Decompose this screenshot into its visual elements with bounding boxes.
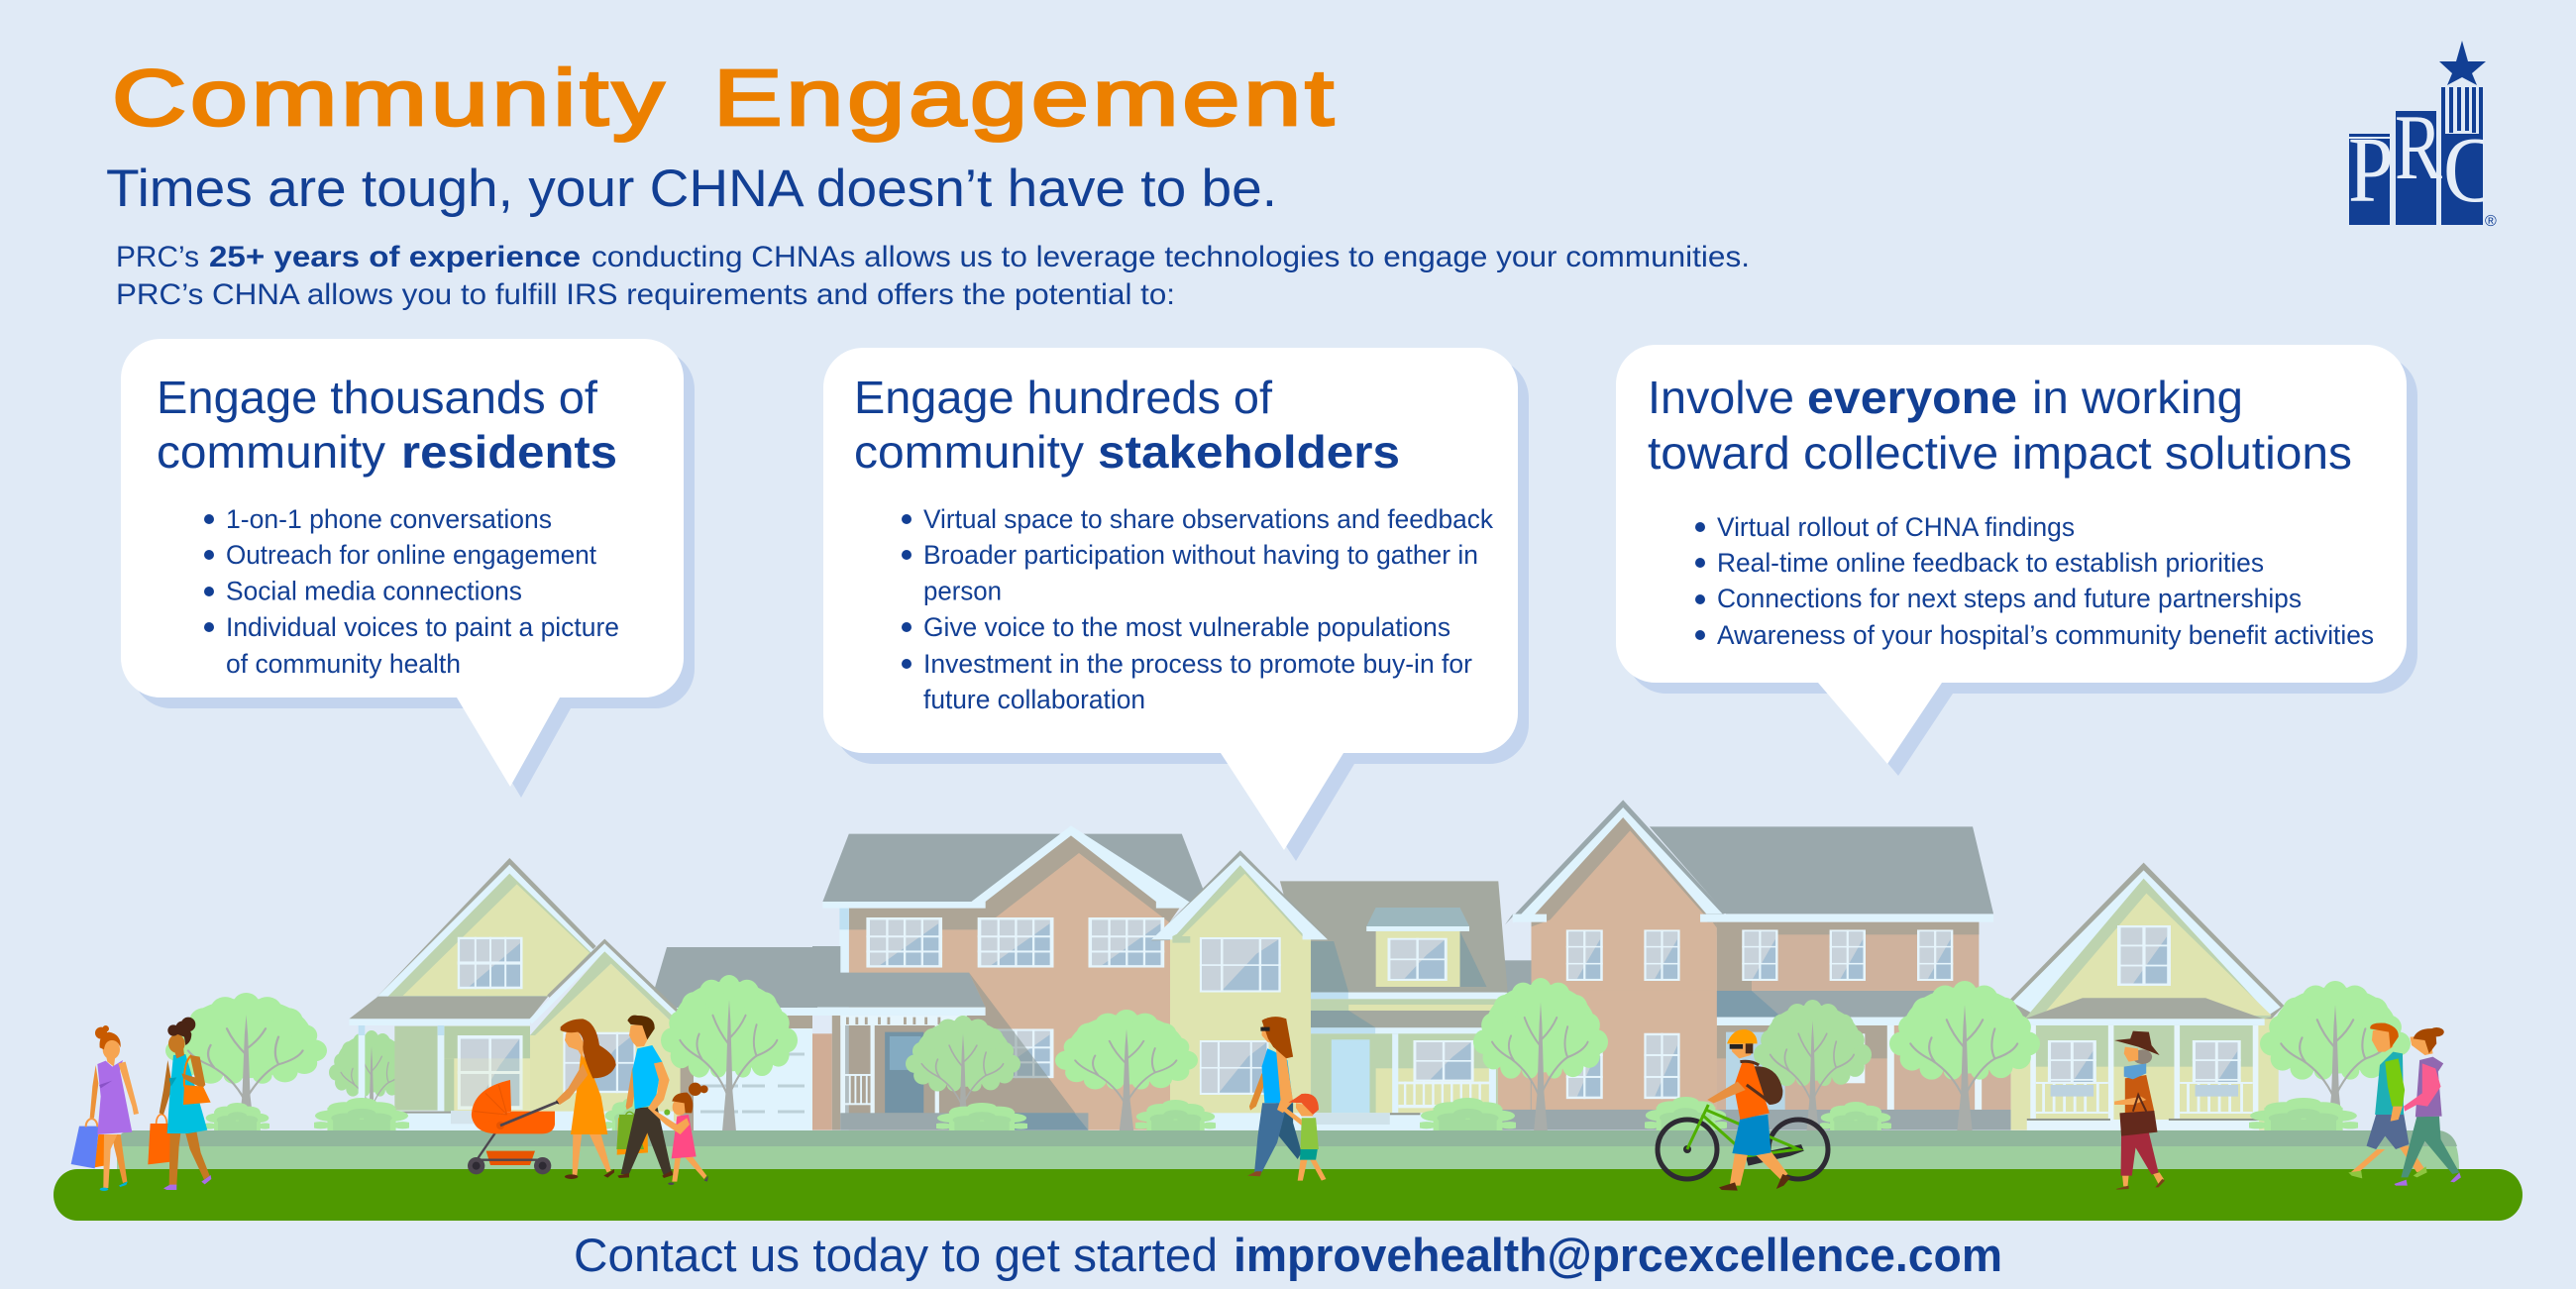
people: family with stroller [468,1016,708,1185]
ground: pavement band [117,1130,2459,1169]
people: walking couple [2348,1023,2461,1186]
logo: PRC: ® [2485,213,2497,230]
bullet list: Connections for next steps and future partnerships [1717,584,2302,613]
logo: PRC: P [2348,119,2394,222]
bullet list [902,504,1493,714]
house: yellow left cottage [349,858,681,1130]
bullet list: person [923,577,1002,606]
heading: toward collective impact solutions [1648,427,2352,479]
people: two women with shopping bags [71,1018,211,1191]
panel: stakeholders speech bubble [823,348,1529,861]
heading: in working [2032,372,2243,423]
heading [1648,372,2352,479]
logo: PRC: C [2443,119,2499,222]
intro paragraph: conducting CHNAs allows us to leverage technologies to engage your communities. [591,241,1750,273]
title: Engagement [713,54,1338,142]
bullet list: Real-time online feedback to establish priorities [1717,548,2264,578]
heading: community [854,426,1084,478]
bullet list: Social media connections [226,577,522,606]
heading: Engage hundreds of [854,372,1272,423]
heading: stakeholders [1098,426,1400,478]
contact line: Contact us today to get started [574,1229,1218,1281]
bullet list: Virtual rollout of CHNA findings [1717,512,2075,542]
heading: Involve [1648,372,1794,423]
bullet list [1695,512,2374,650]
bullet list: Give voice to the most vulnerable populations [923,612,1450,642]
heading: residents [401,426,617,478]
trees [165,975,2411,1130]
bushes [202,1097,2362,1130]
people: cyclist walking bike [1658,1029,1828,1191]
bullet list: Broader participation without having to gather in [923,540,1478,570]
house: tall tan centre [812,825,1533,1130]
house: yellow right cottage [2009,863,2284,1130]
contact line: improvehealth@prcexcellence.com [1234,1229,2002,1281]
bullet list: Outreach for online engagement [226,540,596,570]
heading: Engage thousands of [157,372,597,423]
panel: everyone speech bubble [1616,345,2417,776]
people: woman with boy [1247,1017,1326,1181]
house: large tan right [1486,800,2011,1130]
heading: community [157,426,385,478]
intro paragraph: PRC’s CHNA allows you to fulfill IRS requirements and offers the potential to: [116,278,1175,311]
bullet list: future collaboration [923,685,1145,714]
logo: PRC: R [2395,96,2442,199]
intro paragraph: 25+ years of experience [209,241,581,273]
bullet list: Virtual space to share observations and feedback [923,504,1493,534]
heading: everyone [1807,372,2017,423]
logo: PRC [2348,41,2504,230]
subtitle: Times are tough, your CHNA doesn’t have to be. [106,160,1277,218]
title [112,54,1338,142]
title: Community [112,54,668,142]
house: garage wing [649,947,817,1130]
intro paragraph [116,241,1750,311]
bullet list: Awareness of your hospital’s community benefit activities [1717,620,2374,650]
bullet list: Investment in the process to promote buy-in for [923,649,1472,679]
intro paragraph: PRC’s [116,241,199,273]
bullet list: 1-on-1 phone conversations [226,504,552,534]
panel: residents speech bubble [121,339,695,798]
neighbourhood illustration: houses [329,800,2284,1130]
bullet list: of community health [226,649,461,679]
tree behind porch [329,1030,414,1130]
bullet list [204,504,619,679]
heading [854,372,1400,478]
bullet list: Individual voices to paint a picture [226,612,619,642]
heading [157,372,617,478]
ground: green lawn [54,1169,2522,1221]
contact line [574,1229,2002,1281]
people: older woman with hat [2114,1031,2165,1190]
house: yellow centre with wing [1151,850,1533,1130]
